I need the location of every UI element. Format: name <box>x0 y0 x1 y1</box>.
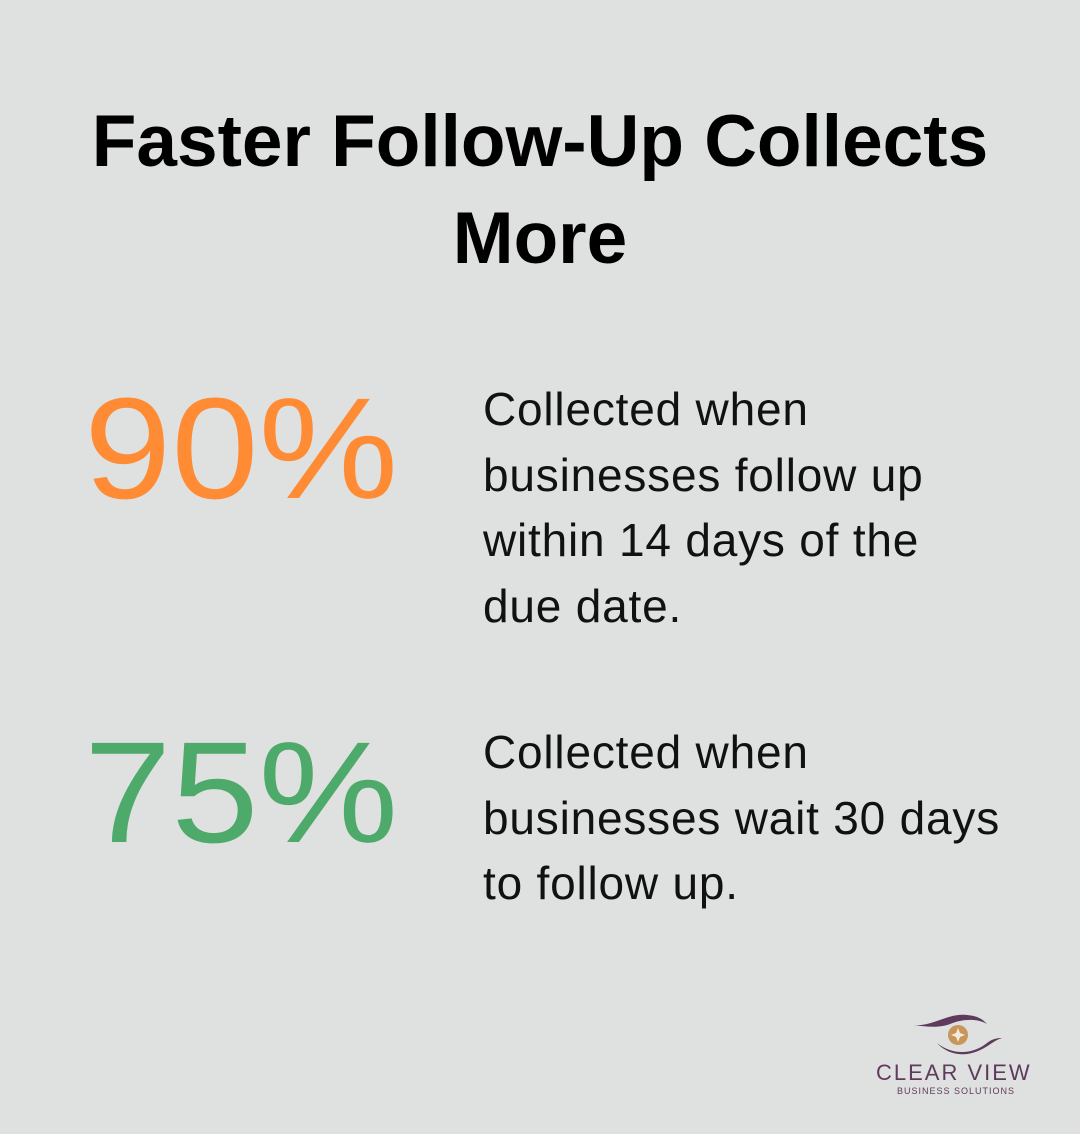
text: 75% description <box>483 726 1000 909</box>
title: Faster Follow-Up Collects <box>92 101 988 182</box>
text: 90% description: businesses follow up <box>483 448 923 500</box>
title: More <box>453 198 627 279</box>
text: 90% description: due date. <box>483 580 682 632</box>
text: 75% description: businesses wait 30 days <box>483 792 1000 844</box>
text: 90% description: Collected when <box>483 383 809 435</box>
text: 75% description: to follow up. <box>483 857 739 909</box>
text: 90% description <box>483 383 923 632</box>
icon: eye <box>914 1014 1002 1054</box>
stat: 90%: 90% <box>84 368 398 529</box>
logo text: CLEAR VIEW <box>876 1060 1032 1085</box>
text: 90% description: within 14 days of the <box>483 514 919 566</box>
logo: Clear View Business Solutions <box>876 1014 1032 1096</box>
logo subtext: BUSINESS SOLUTIONS <box>897 1086 1015 1096</box>
title <box>92 101 988 279</box>
stat: 75%: 75% <box>84 712 398 873</box>
text: 75% description: Collected when <box>483 726 809 778</box>
